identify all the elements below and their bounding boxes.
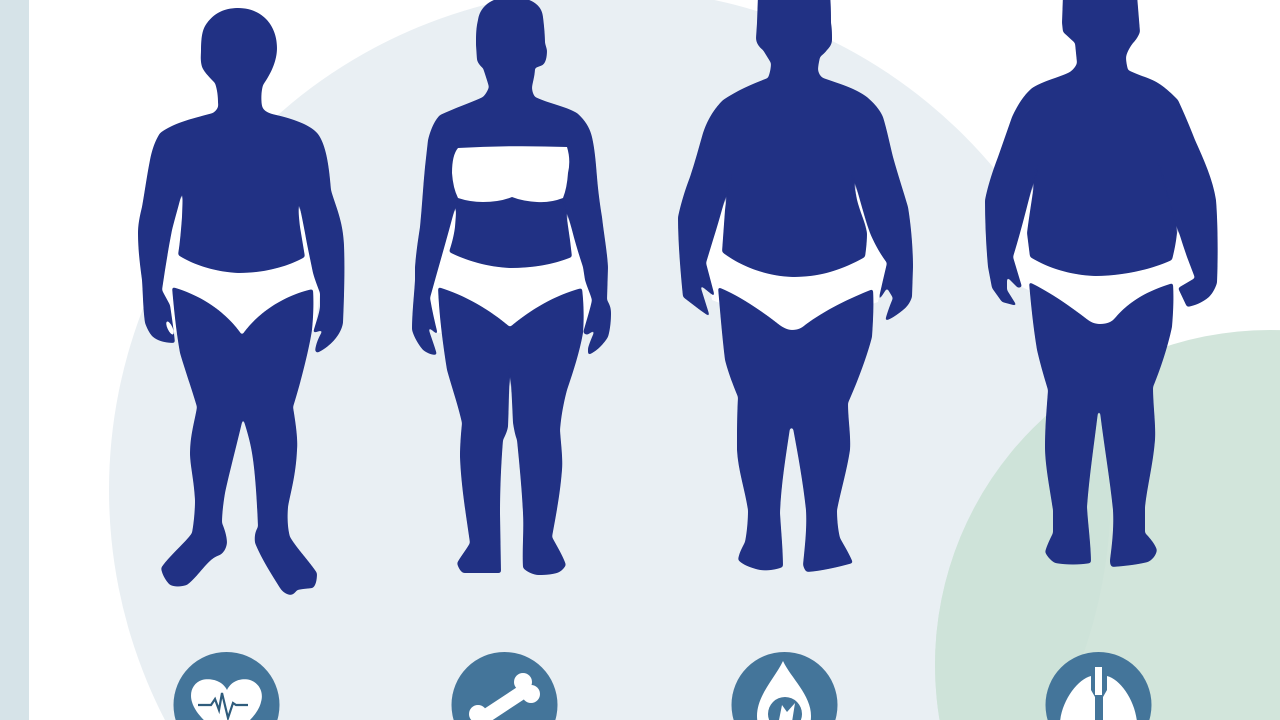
large pale background circle (109, 0, 1111, 720)
figure 1 head, torso and arms (138, 8, 344, 353)
figure 1 white underlay and briefs (160, 188, 320, 336)
green background circle (935, 330, 1280, 720)
figure 4 white underlay and briefs (1013, 160, 1187, 325)
figure 3 legs (718, 287, 873, 572)
figure 2 head, torso and arms (412, 0, 611, 355)
figure 1 legs (161, 287, 317, 595)
figure 4 head, torso and arms (985, 0, 1218, 307)
figure 2: body silhouette with top (412, 0, 611, 575)
figure 4: largest body silhouette (985, 0, 1218, 567)
figure 1 hand gap (165, 321, 175, 335)
icon: bone (452, 652, 558, 720)
figure 3 white underlay and briefs (706, 167, 887, 331)
figure 3 head, torso and arms (678, 0, 913, 321)
left side strip (0, 0, 29, 720)
figure 4 legs (1029, 282, 1173, 567)
icon: drop (732, 652, 838, 720)
icon: lungs (1046, 652, 1152, 720)
figure 2 white underlay and briefs (428, 197, 592, 333)
figure 2 legs (438, 287, 584, 575)
figure 3: larger body silhouette (678, 0, 913, 572)
figure 2 white top (452, 146, 569, 202)
icon: heart with pulse (174, 652, 280, 720)
figure 1: slim body silhouette (138, 8, 344, 595)
